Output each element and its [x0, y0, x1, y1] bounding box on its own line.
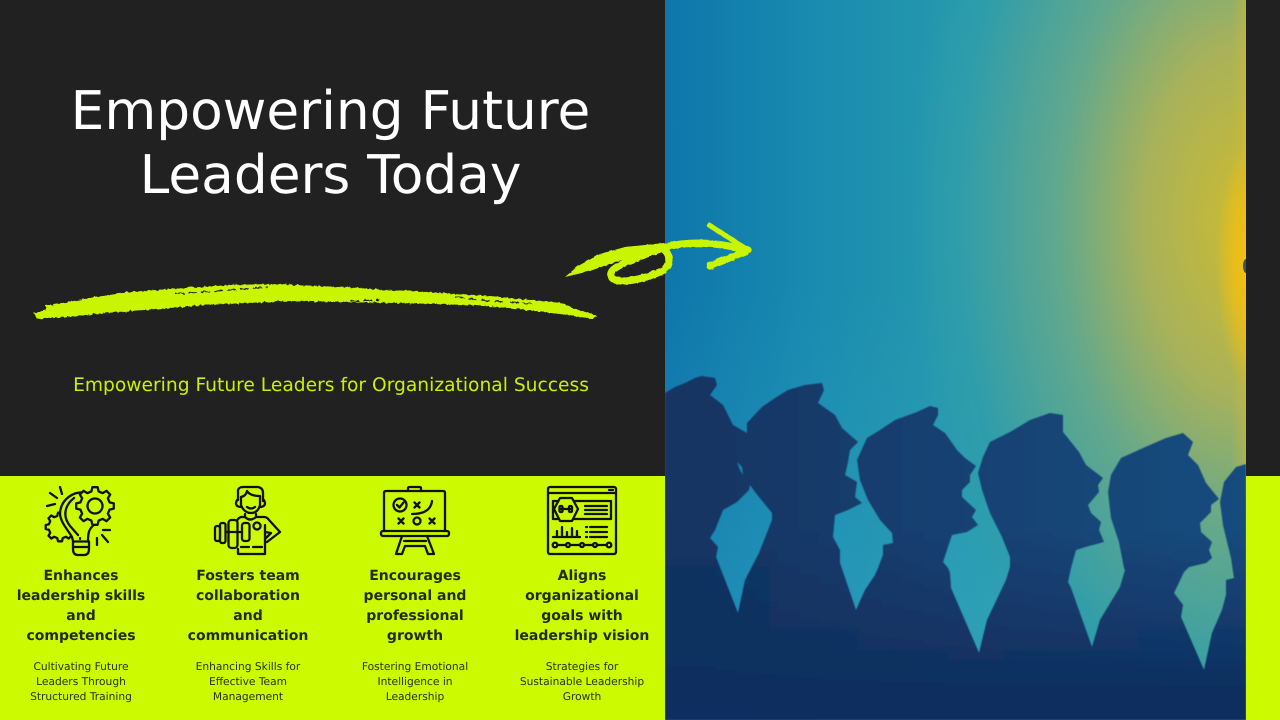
- icon: person lifting dumbbell: [214, 486, 282, 556]
- description: Enhancing Skills for: [196, 660, 300, 673]
- small dark head at right edge: [1243, 259, 1249, 273]
- description: Intelligence in: [377, 675, 453, 688]
- heading: Enhances: [43, 568, 119, 584]
- hand-drawn arrow: [565, 222, 752, 285]
- title: Leaders Today: [140, 143, 521, 206]
- icon: strategy board on easel: [380, 486, 450, 556]
- feature column 4: [515, 486, 649, 703]
- panel: right edge dark strip: [1246, 0, 1280, 476]
- description: Management: [213, 690, 283, 703]
- description: Growth: [563, 690, 601, 703]
- description: Strategies for: [546, 660, 618, 673]
- description: [196, 660, 300, 703]
- subtitle: Empowering Future Leaders for Organizational Success: [73, 375, 589, 396]
- heading: Aligns: [558, 568, 606, 584]
- heading: goals with: [541, 608, 623, 624]
- panel: dark title background: [0, 0, 665, 476]
- description: Cultivating Future: [33, 660, 129, 673]
- heading: leadership vision: [515, 628, 649, 644]
- feature column 2: [188, 486, 308, 703]
- description: Effective Team: [209, 675, 287, 688]
- description: Leadership: [386, 690, 444, 703]
- icon: lightbulb with gears: [44, 486, 115, 556]
- description: Structured Training: [30, 690, 132, 703]
- title: [71, 79, 590, 206]
- heading: and: [66, 608, 96, 624]
- description: Leaders Through: [36, 675, 126, 688]
- heading: personal and: [364, 588, 466, 604]
- heading: collaboration: [196, 588, 300, 604]
- photo: gradient background with leader silhouettes: [665, 0, 1246, 720]
- heading: [188, 568, 308, 644]
- description: [520, 660, 644, 703]
- heading: [17, 568, 145, 644]
- heading: [364, 568, 466, 644]
- heading: Fosters team: [196, 568, 300, 584]
- feature column 1: [17, 486, 145, 703]
- icon: analytics dashboard window: [546, 486, 618, 556]
- description: Sustainable Leadership: [520, 675, 644, 688]
- heading: [515, 568, 649, 644]
- heading: professional: [366, 608, 464, 624]
- heading: communication: [188, 628, 308, 644]
- heading: competencies: [26, 628, 136, 644]
- feature column 3: [362, 486, 468, 703]
- heading: leadership skills: [17, 588, 145, 604]
- heading: and: [233, 608, 263, 624]
- brush stroke underline: [33, 284, 597, 320]
- description: [362, 660, 468, 703]
- title: Empowering Future: [71, 79, 590, 142]
- description: Fostering Emotional: [362, 660, 468, 673]
- description: [30, 660, 132, 703]
- panel: lime feature band: [0, 476, 665, 720]
- heading: growth: [387, 628, 443, 644]
- panel: right edge lime strip: [1246, 476, 1280, 720]
- heading: organizational: [525, 588, 639, 604]
- heading: Encourages: [369, 568, 461, 584]
